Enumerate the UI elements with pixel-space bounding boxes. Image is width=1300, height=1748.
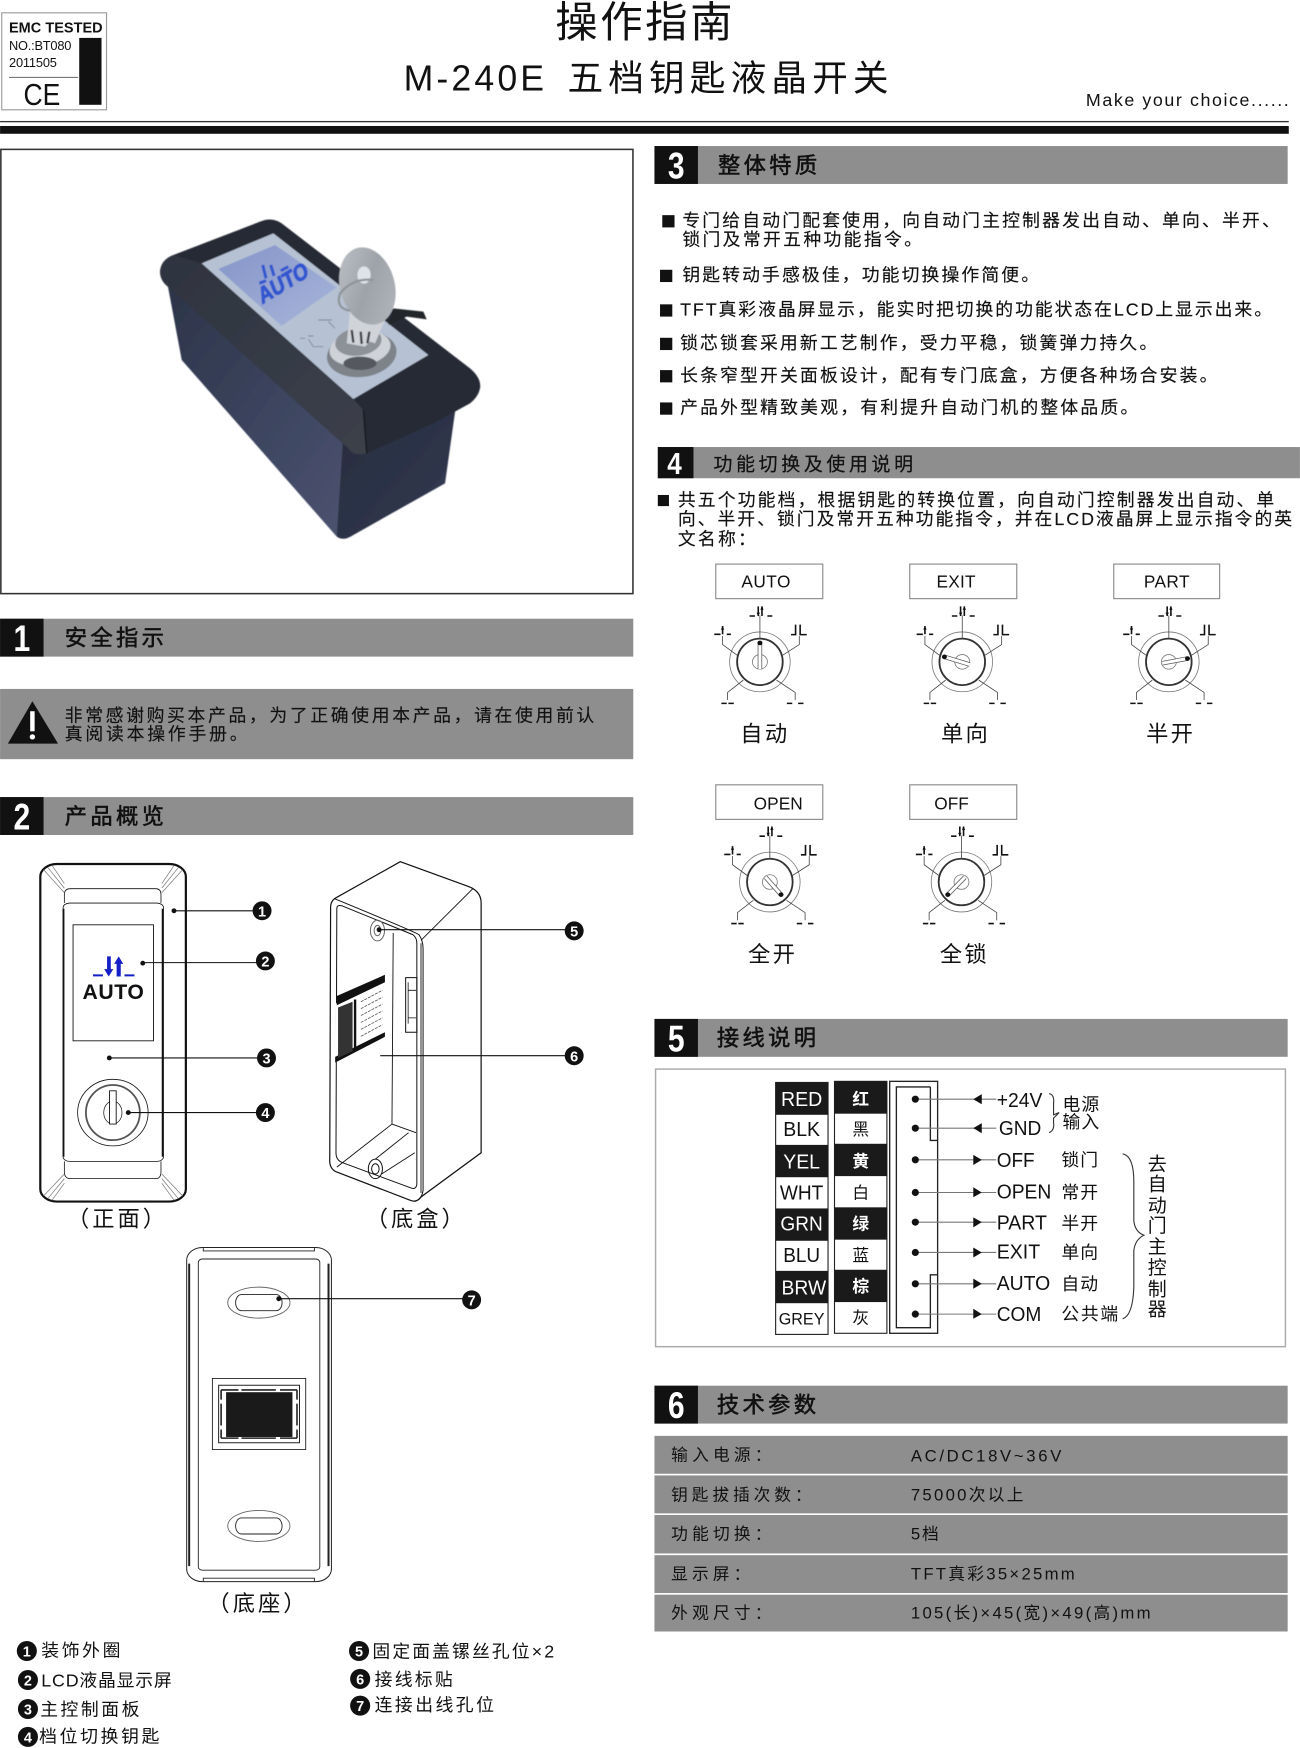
callouts: numbered pointers: 7 — [468, 1293, 476, 1309]
signal labels: PART — [997, 1213, 1047, 1235]
wire colour Chinese names — [834, 1081, 887, 1333]
legend: parts list: 固定面盖镙丝孔位×2 — [372, 1642, 554, 1662]
wire colour Chinese names: 蓝 — [852, 1246, 869, 1265]
signal labels — [997, 1090, 1118, 1326]
diagram: base box — [330, 862, 481, 1202]
signal labels: OFF — [997, 1150, 1035, 1172]
table: technical parameters: 75000次以上 — [911, 1486, 1023, 1505]
panel: product photo — [1, 149, 633, 594]
heading: section 4: 4 — [667, 448, 682, 481]
dial: EXIT: EXIT — [937, 571, 976, 591]
dial: EXIT — [910, 564, 1017, 746]
wire colour Chinese names: 红 — [852, 1090, 869, 1109]
legend: parts list: 连接出线孔位 — [375, 1695, 494, 1715]
wire colour names: WHT — [780, 1183, 823, 1205]
heading: section 1 — [0, 618, 633, 659]
certification badge — [2, 13, 107, 112]
signal labels: 半开 — [1061, 1214, 1098, 1234]
heading: section 5: 5 — [668, 1018, 685, 1059]
signal labels: COM — [997, 1304, 1041, 1326]
connector pins and wires — [912, 1094, 996, 1319]
view captions: （正面） — [67, 1206, 165, 1231]
table: technical parameters: 显示屏： — [671, 1565, 750, 1584]
vertical label: 器 — [1148, 1299, 1167, 1320]
signal labels: OPEN — [997, 1181, 1051, 1203]
table: technical parameters: AC/DC18V~36V — [911, 1446, 1062, 1465]
text block: overall features: 锁芯锁套采用新工艺制作，受力平稳，锁簧弹力持久。 — [680, 333, 1157, 353]
text block: overall features: 钥匙转动手感极佳，功能切换操作简便。 — [682, 265, 1039, 285]
diagram: front view: AUTO — [83, 981, 144, 1004]
dial: OPEN: 全开 — [748, 942, 795, 967]
legend: parts list: 3 — [24, 1703, 32, 1719]
text block: overall features: TFT真彩液晶屏显示，能实时把切换的功能状态在LCD上显示出来。 — [680, 299, 1272, 319]
title: M-240E — [404, 58, 544, 98]
wire colour names — [776, 1082, 828, 1334]
text block: overall features: 专门给自动门配套使用，向自动门主控制器发出自动、单向、半开、 — [682, 210, 1280, 230]
signal labels: +24V — [997, 1090, 1043, 1112]
heading: section 3 — [654, 145, 1288, 186]
diagram: front view — [40, 864, 186, 1202]
callout: safety notice: 真阅读本操作手册。 — [65, 724, 248, 744]
title — [404, 0, 889, 98]
callouts: numbered pointers: 1 — [258, 904, 266, 920]
signal labels: 自动 — [1061, 1274, 1098, 1294]
callouts: numbered pointers: 4 — [261, 1106, 269, 1122]
heading: section 2: 2 — [13, 796, 30, 837]
dial: PART: PART — [1144, 571, 1190, 591]
legend: parts list: 2 — [24, 1674, 32, 1690]
connector block — [890, 1081, 938, 1333]
panel: wiring diagram — [656, 1069, 1285, 1347]
legend: parts list: 4 — [24, 1730, 32, 1746]
vertical label: 主 — [1148, 1236, 1167, 1258]
signal labels: AUTO — [997, 1273, 1050, 1295]
certification badge: 2011505 — [9, 55, 57, 70]
vertical label: 去 — [1148, 1154, 1167, 1176]
text block: function description: 文名称： — [678, 529, 756, 549]
legend: parts list: 主控制面板 — [40, 1700, 140, 1720]
dial: OFF: 全锁 — [940, 942, 987, 967]
signal labels: 输入 — [1062, 1112, 1099, 1132]
wire colour names: BLU — [783, 1245, 820, 1267]
callouts: numbered pointers: 3 — [262, 1052, 271, 1068]
vertical label: 门 — [1148, 1215, 1167, 1237]
signal labels: 锁门 — [1061, 1150, 1098, 1170]
certification badge: EMC TESTED — [9, 20, 103, 36]
vertical label — [1148, 1154, 1167, 1320]
vertical label: 动 — [1148, 1195, 1167, 1217]
heading: section 4 — [658, 447, 1300, 481]
callouts: numbered pointers: 2 — [261, 955, 269, 971]
heading: section 1: 1 — [13, 618, 30, 659]
header rule — [0, 121, 1289, 134]
wire colour names: RED — [781, 1089, 822, 1111]
dial: PART: 半开 — [1146, 721, 1193, 746]
heading: section 6: 技术参数 — [717, 1392, 816, 1417]
view captions: （底座） — [207, 1591, 306, 1616]
photo: switch device: AUTO — [255, 257, 312, 309]
heading: section 1: 安全指示 — [65, 625, 164, 650]
text block: overall features — [660, 210, 1280, 418]
icon: warning triangle — [8, 701, 58, 744]
wire colour Chinese names: 白 — [852, 1183, 869, 1202]
wire colour Chinese names: 绿 — [852, 1214, 869, 1234]
wire colour Chinese names: 棕 — [852, 1276, 869, 1296]
wire colour names: GRN — [780, 1214, 823, 1236]
callout: safety notice — [0, 689, 633, 759]
wire colour Chinese names: 黑 — [852, 1120, 869, 1139]
vertical label: 控 — [1148, 1257, 1167, 1279]
table: technical parameters: 功能切换： — [671, 1525, 772, 1544]
signal labels: 电源 — [1062, 1094, 1099, 1114]
legend: parts list: 接线标贴 — [375, 1670, 453, 1690]
wire colour names: GREY — [779, 1309, 824, 1328]
dial: EXIT: 单向 — [941, 721, 988, 746]
signal labels: GND — [999, 1118, 1041, 1140]
text block: overall features: 长条窄型开关面板设计，配有专门底盒，方便各种场合安装。 — [680, 365, 1217, 385]
title: 五档钥匙液晶开关 — [568, 58, 889, 98]
legend: parts list: 7 — [356, 1699, 364, 1715]
signal labels: 单向 — [1061, 1243, 1098, 1263]
vertical label: 自 — [1148, 1174, 1167, 1196]
callouts: numbered pointers — [107, 901, 584, 1309]
wire colour Chinese names: 黄 — [852, 1152, 869, 1171]
tagline: Make your choice...... — [1086, 90, 1289, 110]
wire colour names: BRW — [782, 1277, 826, 1299]
text block: overall features: 产品外型精致美观，有利提升自动门机的整体品质。 — [680, 398, 1138, 418]
heading: section 5: 接线说明 — [717, 1026, 816, 1051]
heading: section 5 — [654, 1018, 1288, 1059]
text block: function description: 向、半开、锁门及常开五种功能指令，并在LCD液晶屏上显示指令的英 — [678, 509, 1292, 529]
legend: parts list: LCD液晶显示屏 — [41, 1671, 172, 1691]
text block: function description — [658, 490, 1292, 549]
heading: section 6 — [654, 1385, 1288, 1426]
signal labels: 常开 — [1061, 1182, 1098, 1202]
callouts: numbered pointers: 6 — [570, 1049, 578, 1065]
heading: section 2: 产品概览 — [65, 804, 164, 829]
text block: overall features: 锁门及常开五种功能指令。 — [682, 229, 922, 249]
vertical label: 制 — [1148, 1278, 1167, 1300]
table: technical parameters — [654, 1436, 1288, 1632]
dial: PART — [1114, 564, 1220, 746]
view captions — [67, 1206, 464, 1616]
table: technical parameters: 5档 — [911, 1525, 939, 1544]
diagram: base plate — [187, 1248, 331, 1582]
heading: section 3: 3 — [668, 145, 685, 186]
callout: safety notice: 非常感谢购买本产品，为了正确使用本产品，请在使用前认 — [65, 705, 594, 725]
dial: OFF — [910, 785, 1017, 967]
heading: section 6: 6 — [668, 1385, 685, 1426]
callouts: numbered pointers: 5 — [570, 924, 578, 940]
table: technical parameters: 钥匙拔插次数： — [671, 1486, 812, 1505]
legend: parts list: 档位切换钥匙 — [39, 1726, 160, 1746]
wire colour names: YEL — [783, 1151, 820, 1173]
text block: function description: 共五个功能档，根据钥匙的转换位置，向自动门控制器发出自动、单 — [678, 490, 1274, 510]
heading: section 2 — [0, 796, 633, 837]
dial: AUTO: AUTO — [741, 571, 790, 591]
table: technical parameters: 105(长)×45(宽)×49(高)mm — [911, 1604, 1151, 1623]
dial: OPEN: OPEN — [754, 793, 803, 813]
wire colour names: BLK — [783, 1119, 821, 1141]
view captions: （底盒） — [366, 1206, 464, 1231]
certification badge: NO.:BT080 — [9, 38, 71, 53]
legend: parts list: 1 — [23, 1645, 31, 1661]
dial: OFF: OFF — [934, 793, 969, 813]
legend: parts list: 5 — [355, 1645, 363, 1661]
signal labels: EXIT — [997, 1242, 1040, 1264]
legend: parts list: 6 — [356, 1672, 364, 1688]
heading: section 3: 整体特质 — [718, 153, 817, 178]
photo: switch device — [160, 220, 480, 539]
title: 操作指南 — [555, 0, 732, 46]
legend: parts list — [17, 1641, 554, 1747]
certification badge: CE — [23, 79, 60, 112]
legend: parts list: 装饰外圈 — [41, 1641, 120, 1661]
signal labels: 公共端 — [1061, 1304, 1118, 1324]
table: technical parameters: 外观尺寸： — [671, 1604, 772, 1623]
wire colour Chinese names: 灰 — [852, 1308, 869, 1327]
dial: AUTO — [714, 564, 823, 746]
heading: section 4: 功能切换及使用说明 — [714, 453, 913, 475]
dial: OPEN — [716, 785, 823, 967]
braces — [1049, 1094, 1144, 1319]
table: technical parameters: 输入电源： — [671, 1445, 772, 1464]
dial: AUTO: 自动 — [740, 721, 787, 746]
table: technical parameters: TFT真彩35×25mm — [911, 1565, 1075, 1584]
